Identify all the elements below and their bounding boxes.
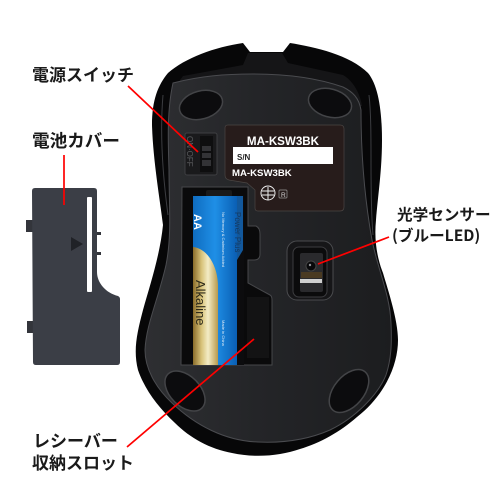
battery cover bbox=[26, 188, 120, 365]
label: optical sensor bbox=[392, 203, 491, 246]
power switch: ON·OFF bbox=[185, 136, 194, 167]
base plate bbox=[145, 74, 391, 442]
label: power switch: 電源スイッチ bbox=[32, 61, 134, 86]
mouse outer shell bbox=[136, 43, 398, 456]
AA battery bbox=[191, 190, 244, 365]
callout lines bbox=[64, 86, 389, 447]
AA battery: Alkaline bbox=[193, 280, 208, 326]
cover tabs bbox=[26, 220, 101, 333]
AA battery: Made in China bbox=[221, 320, 226, 347]
certification mark bbox=[261, 186, 275, 200]
cover arrow bbox=[71, 237, 83, 251]
serial text: S/N bbox=[237, 153, 251, 162]
model number: MA-KSW3BK bbox=[247, 135, 320, 148]
label: optical sensor: 光学センサー bbox=[397, 203, 491, 225]
label: battery cover: 電池カバー bbox=[32, 128, 120, 153]
receiver slot bbox=[247, 297, 269, 358]
mouse body bbox=[136, 43, 398, 456]
label: receiver slot bbox=[32, 427, 134, 474]
optical sensor bbox=[287, 241, 333, 300]
power switch bbox=[185, 133, 217, 175]
serial number box bbox=[233, 147, 333, 164]
model number second line: MA-KSW3BK bbox=[232, 168, 292, 179]
label: optical sensor: (ブルーLED) bbox=[392, 224, 480, 246]
foot pads bbox=[157, 84, 377, 420]
cover panel bbox=[32, 188, 120, 365]
shell highlight lines bbox=[162, 95, 373, 235]
AA battery: AA bbox=[191, 214, 203, 230]
AA battery: Power Plus bbox=[233, 212, 242, 252]
label: receiver slot: 収納スロット bbox=[32, 449, 134, 474]
top band around notch bbox=[169, 53, 362, 112]
product label bbox=[225, 125, 344, 211]
cover slot bbox=[87, 197, 92, 292]
AA battery: No Memory & Cadmium Added bbox=[221, 212, 226, 267]
battery compartment bbox=[181, 187, 272, 365]
label: receiver slot: レシーバー bbox=[33, 427, 118, 452]
registered mark: R bbox=[281, 192, 286, 199]
